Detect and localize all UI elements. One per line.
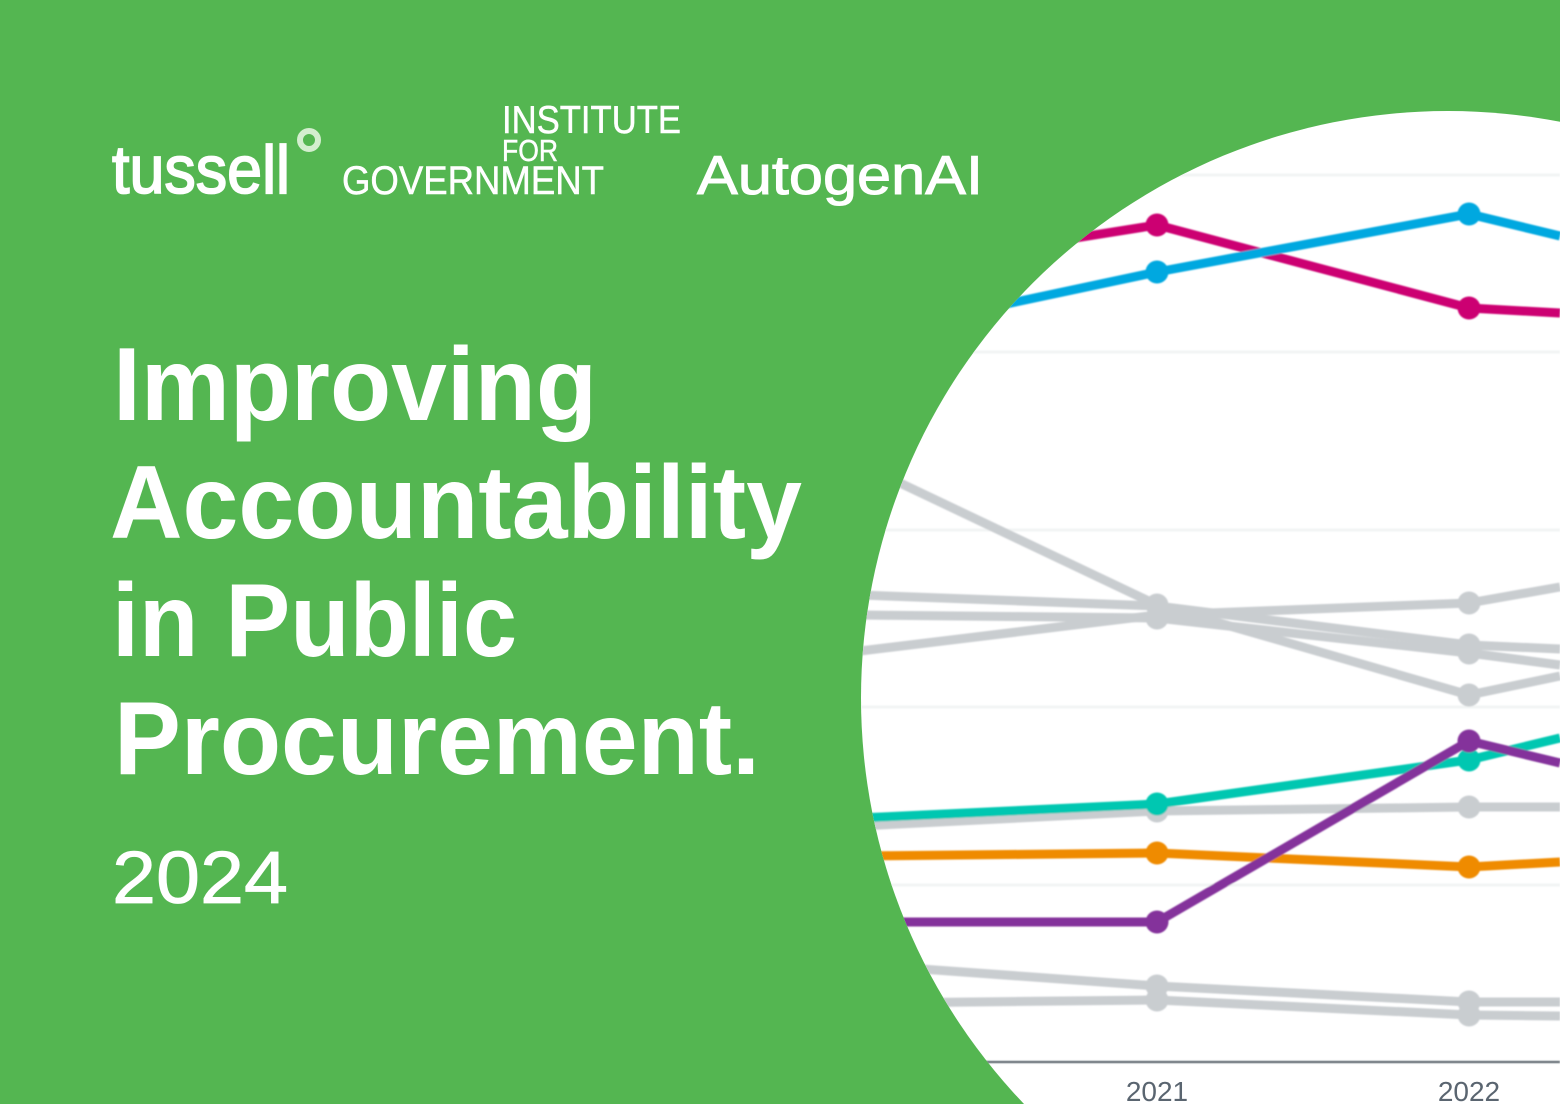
logo: Institute for Government: GOVERNMENT bbox=[342, 159, 604, 203]
panel: circular chart image bbox=[850, 100, 1560, 1104]
title: Accountability bbox=[110, 445, 802, 561]
grey comparison lines bbox=[860, 464, 1560, 1026]
teal line bbox=[860, 738, 1560, 818]
title: in Public bbox=[112, 563, 517, 679]
logo: Institute for Government: INSTITUTE bbox=[502, 99, 681, 142]
logo: Institute for Government bbox=[342, 99, 681, 203]
orange line bbox=[860, 842, 1560, 878]
axis labels bbox=[1127, 1082, 1499, 1102]
title bbox=[110, 327, 802, 797]
year: 2024 bbox=[112, 836, 288, 919]
purple line bbox=[860, 730, 1560, 934]
title: Improving bbox=[113, 327, 597, 443]
pink line bbox=[1077, 212, 1560, 320]
blue line bbox=[1008, 202, 1560, 310]
logo: Institute for Government: FOR bbox=[502, 133, 558, 168]
logo: AutogenAI: AutogenAI bbox=[697, 144, 983, 206]
title: Procurement. bbox=[114, 681, 760, 797]
logo: tussell: tussell bbox=[112, 132, 290, 208]
